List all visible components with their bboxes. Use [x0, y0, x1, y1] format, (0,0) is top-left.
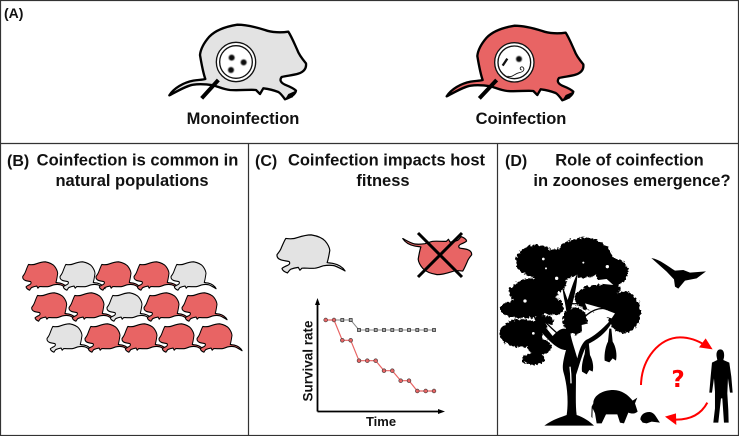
scene [500, 238, 733, 426]
axis arrowheads [315, 298, 445, 414]
label B: (B) [7, 153, 29, 170]
icon: hedgehog [640, 412, 660, 423]
icon: human [709, 349, 733, 423]
coinfected rodent with magnifier [447, 26, 583, 100]
heading: monoinfection: Monoinfection [187, 110, 299, 128]
heading D: in zoonoses emergence? [533, 172, 731, 190]
monoinfected rodent with magnifier [169, 25, 306, 99]
icon: pig [591, 390, 638, 423]
panel B [7, 152, 242, 352]
healthy rodent [277, 235, 345, 273]
dead rodent crossed out [403, 233, 472, 277]
coinfection series [324, 318, 436, 393]
heading C: Coinfection impacts host [288, 152, 486, 170]
label C: (C) [255, 153, 277, 170]
survival chart [300, 298, 445, 429]
x axis label: Time [366, 414, 396, 429]
heading: coinfection: Coinfection [476, 110, 566, 128]
heading D: Role of coinfection [555, 152, 704, 170]
panel C [255, 152, 486, 429]
label D: (D) [505, 153, 527, 170]
heading C: fitness [356, 172, 410, 190]
panel A [4, 5, 583, 128]
icon: flying bat [651, 258, 706, 289]
arrow: upper red arc [641, 337, 713, 385]
monoinfection series [326, 318, 436, 332]
icon: tree [500, 238, 641, 426]
arrow: lower red arc [665, 403, 707, 425]
label A: (A) [4, 5, 23, 21]
rodent population [23, 262, 242, 352]
icon: hanging bat right [605, 329, 616, 362]
y axis label: Survival rate [300, 320, 316, 402]
question mark: ? [671, 367, 685, 393]
icon: hanging bat left [582, 342, 593, 374]
panel D [500, 152, 733, 426]
axes [318, 302, 441, 412]
heading B: Coinfection is common in [37, 152, 238, 170]
heading B: natural populations [55, 172, 209, 190]
